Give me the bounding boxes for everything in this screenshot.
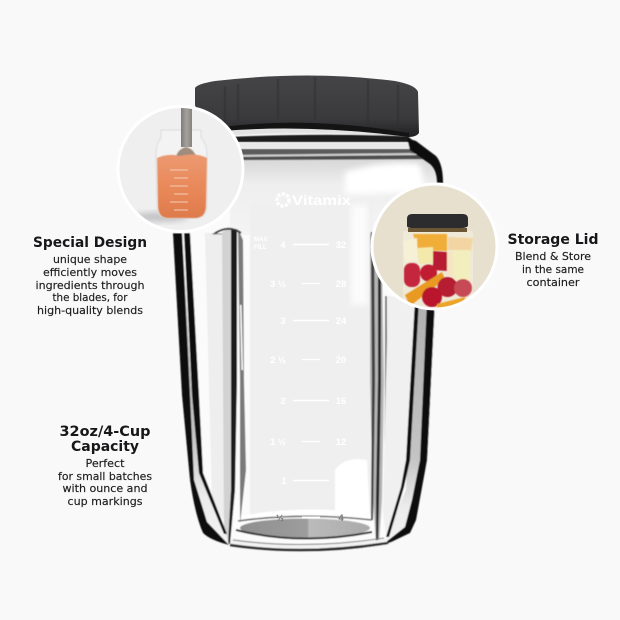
measurement markings: FILL <box>254 245 267 251</box>
text block: Special Design: the blades, for <box>52 291 128 304</box>
measurement markings: 12 <box>336 437 346 448</box>
bottom rim <box>230 538 388 550</box>
text block: capacity: cup markings <box>68 495 143 508</box>
measurement markings: 20 <box>336 355 346 366</box>
text block: Special Design: Special Design <box>33 235 147 251</box>
text block: capacity: 32oz/4-Cup <box>60 424 150 440</box>
measurement markings: MAX <box>254 237 267 243</box>
text block: capacity: with ounce and <box>62 482 148 495</box>
logo: Vitamix <box>277 193 352 208</box>
measurement markings: 24 <box>336 316 347 327</box>
callout image: storage jar with fruit <box>370 182 498 312</box>
measurement markings: 3 ½ <box>270 279 286 290</box>
measurement markings: 1 ½ <box>270 437 286 448</box>
measurement markings: 1 <box>281 476 287 487</box>
logo: Vitamix: Vitamix <box>292 193 352 208</box>
measurement markings: 4 <box>280 240 286 251</box>
text block: Special Design: efficiently moves <box>43 266 137 279</box>
measurement markings: 28 <box>336 279 346 290</box>
lid <box>195 76 419 137</box>
upper shoulder glass <box>230 158 437 235</box>
measurement markings: 3 <box>280 316 286 327</box>
measurement markings: 2 ½ <box>270 355 286 366</box>
text block: capacity <box>58 424 152 508</box>
callout image: juice jar with spoon <box>116 105 244 233</box>
jar body <box>173 135 441 550</box>
text block: Storage Lid <box>508 232 598 289</box>
text block: Storage Lid: Blend & Store <box>515 250 591 263</box>
measurement markings: 16 <box>336 396 346 407</box>
text block: capacity: Perfect <box>86 457 125 470</box>
centre panel <box>250 205 372 520</box>
product: blender container <box>173 76 443 550</box>
left inner side panel <box>205 233 224 520</box>
text block: Special Design: high-quality blends <box>37 304 143 317</box>
text block: capacity: for small batches <box>58 470 152 483</box>
text block: Storage Lid: in the same <box>522 263 584 276</box>
text block: capacity: Capacity <box>71 439 140 455</box>
text block: Special Design: unique shape <box>53 253 127 266</box>
fruit <box>403 234 473 311</box>
left outer wall <box>173 233 229 545</box>
shoulder bands <box>225 127 443 183</box>
measurement markings: 32 <box>336 240 346 251</box>
right panel edge <box>370 232 384 544</box>
base <box>234 514 374 540</box>
text block: Special Design: ingredients through <box>36 279 145 292</box>
measurement markings: ½ <box>276 513 284 524</box>
right outer wall <box>385 300 435 544</box>
text block: Special Design <box>33 235 147 317</box>
measurement markings <box>254 237 347 524</box>
right shoulder <box>407 138 443 183</box>
measurement markings: 2 <box>280 396 286 407</box>
text block: Storage Lid: Storage Lid <box>508 232 598 248</box>
text block: Storage Lid: container <box>526 276 580 289</box>
measurement markings: 4 <box>338 513 344 524</box>
